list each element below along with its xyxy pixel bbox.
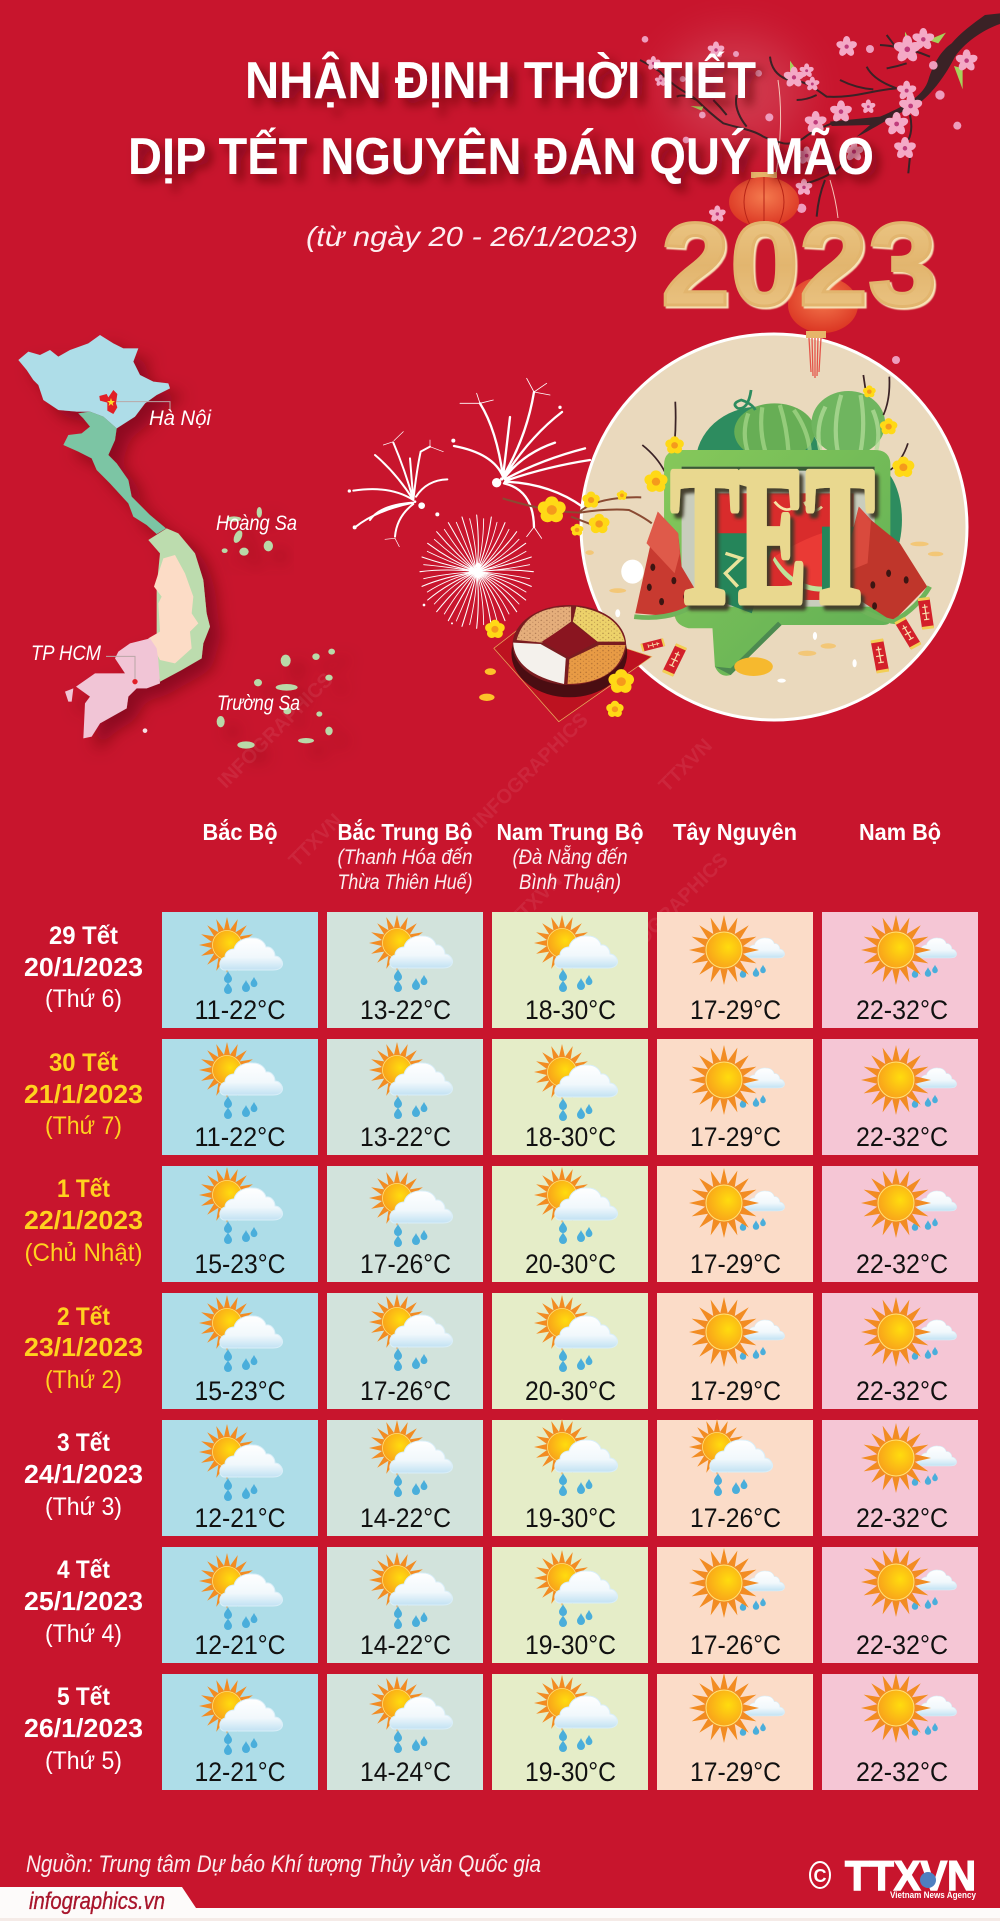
tendril (735, 390, 755, 410)
row label: 29 Tet: 29 Tết (49, 922, 119, 950)
weather row: 29 Tet: 11-22°C (194, 995, 286, 1025)
header: Nam Trung Bo: Bình Thuận) (519, 871, 621, 894)
weather row: 30 Tet: 22-32°C (856, 1122, 948, 1152)
weather row: 5 Tet: 22-32°C (856, 1757, 948, 1787)
weather row: 1 Tet: 20-30°C (525, 1249, 616, 1279)
row label: 30 Tet: (Thứ 7) (45, 1112, 122, 1140)
mam ngu qua tray (494, 605, 652, 722)
firecrackers (640, 597, 934, 677)
header: Nam Trung Bo: (Đà Nẵng đến (512, 846, 628, 869)
map labels: Hà Nội (149, 407, 212, 430)
map labels: Trường Sa (217, 692, 300, 715)
Hoang Sa islands (222, 507, 273, 556)
weather row: 3 Tet: 17-26°C (690, 1503, 781, 1533)
poster behind letters (717, 493, 854, 613)
speech bubble frame (664, 450, 890, 676)
weather row: 4 Tet: 17-26°C (690, 1630, 781, 1660)
TTXVN logo: Vietnam News Agency (890, 1890, 976, 1900)
weather row: 2 Tet: 15-23°C (194, 1376, 286, 1406)
weather row: 1 Tet: 15-23°C (194, 1249, 286, 1279)
leader lines (106, 402, 170, 680)
weather row: 5 Tet: 19-30°C (525, 1757, 616, 1787)
weather row: 4 Tet: 19-30°C (525, 1630, 616, 1660)
regions (18, 335, 210, 738)
footer tab: infographics.vn (29, 1888, 165, 1915)
fireworks (348, 378, 590, 628)
header: Tay Nguyen: Tây Nguyên (673, 819, 797, 845)
row label: 29 Tet (24, 922, 143, 1013)
lantern 2 (788, 277, 858, 333)
Tet artwork (479, 375, 943, 722)
row label: 1 Tet: 1 Tết (57, 1175, 111, 1203)
HCM marker (132, 679, 138, 684)
weather row: 1 Tet (162, 1166, 978, 1282)
yellow blossom branch (503, 385, 916, 537)
firework burst 1 (348, 432, 447, 547)
row label: 5 Tet (24, 1683, 143, 1775)
Hanoi marker (99, 390, 117, 414)
weather row: 30 Tet: 13-22°C (360, 1122, 451, 1152)
weather row: 30 Tet: 11-22°C (194, 1122, 286, 1152)
title: DỊP TẾT NGUYÊN ĐÁN QUÝ MÃO (128, 127, 874, 186)
row label: 2 Tet: (Thứ 2) (45, 1366, 122, 1394)
watermarks (214, 669, 733, 973)
watermarks: TTXVN (285, 810, 347, 872)
weather row: 3 Tet: 19-30°C (525, 1503, 616, 1533)
row label: 3 Tet (24, 1429, 143, 1521)
header: Nam Trung Bo (496, 819, 644, 894)
right watermelon slice (836, 507, 930, 622)
weather row: 30 Tet: 17-29°C (690, 1122, 781, 1152)
tray flowers (479, 620, 636, 719)
TTXVN logo: TTXVN (845, 1852, 976, 1899)
plum blossom branch (640, 13, 1000, 223)
row label: 4 Tet: 4 Tết (57, 1556, 111, 1584)
left watermelon slice (634, 512, 703, 618)
weather row: 2 Tet: 17-29°C (690, 1376, 781, 1406)
row label: 30 Tet: 30 Tết (49, 1049, 119, 1077)
map of Vietnam (18, 335, 335, 749)
weather row: 29 Tet (162, 912, 978, 1028)
firework burst 2 (451, 378, 590, 538)
melon right (811, 391, 885, 456)
row label: 3 Tet: 24/1/2023 (24, 1459, 143, 1489)
lantern 1 (729, 172, 799, 227)
weather row: 3 Tet: 22-32°C (856, 1503, 948, 1533)
weather row: 29 Tet: 13-22°C (360, 995, 451, 1025)
footer tab (0, 1887, 1000, 1921)
row label: 5 Tet: 26/1/2023 (24, 1713, 143, 1743)
TTXVN logo: C (814, 1866, 826, 1886)
map labels (31, 407, 300, 715)
lantern tassel (806, 331, 826, 378)
row label: 2 Tet: 2 Tết (57, 1303, 111, 1331)
header: Bac Trung Bo: Bắc Trung Bộ (338, 818, 472, 845)
map labels: TP HCM (31, 642, 101, 665)
row label: 4 Tet: 25/1/2023 (24, 1586, 143, 1616)
watermarks: INFOGRAPHICS (609, 849, 733, 973)
weather row: 1 Tet: 17-26°C (360, 1249, 451, 1279)
watermarks: INFOGRAPHICS (469, 709, 593, 833)
row label: 29 Tet: (Thứ 6) (45, 985, 122, 1013)
subtitle: (từ ngày 20 - 26/1/2023) (306, 221, 638, 252)
weather row: 5 Tet: 17-29°C (690, 1757, 781, 1787)
row label: 2 Tet: 23/1/2023 (24, 1332, 143, 1362)
weather row: 29 Tet: 22-32°C (856, 995, 948, 1025)
header: Bac Trung Bo: Thừa Thiên Huế) (338, 871, 472, 894)
year 2023: 2023 (661, 199, 937, 331)
header: Bac Trung Bo (338, 818, 472, 894)
map labels: Hoàng Sa (216, 512, 297, 535)
row label: 3 Tet: (Thứ 3) (45, 1493, 122, 1521)
row label: 2 Tet (24, 1303, 143, 1394)
header: Nam Trung Bo: Nam Trung Bộ (496, 819, 644, 845)
title: NHẬN ĐỊNH THỜI TIẾT (245, 51, 756, 110)
weather row: 4 Tet: 12-21°C (194, 1630, 286, 1660)
header: Nam Bo: Nam Bộ (859, 819, 941, 845)
title (128, 51, 874, 186)
row label: 1 Tet: (Chủ Nhật) (24, 1239, 142, 1267)
weather row: 3 Tet (162, 1419, 978, 1536)
weather row: 30 Tet: 18-30°C (525, 1122, 616, 1152)
lantern strings (776, 80, 838, 218)
row label: 30 Tet (24, 1049, 143, 1140)
weather row: 5 Tet: 14-24°C (360, 1757, 451, 1787)
weather row: 29 Tet: 18-30°C (525, 995, 616, 1025)
row label: 1 Tet (24, 1175, 143, 1267)
weather row: 4 Tet (162, 1547, 978, 1663)
column headers (202, 818, 941, 894)
weather row: 4 Tet: 22-32°C (856, 1630, 948, 1660)
melon left (734, 403, 815, 460)
row label: 4 Tet: (Thứ 4) (45, 1620, 122, 1648)
source note: Nguồn: Trung tâm Dự báo Khí tượng Thủy văn Quốc gia (26, 1851, 541, 1878)
twigs (642, 375, 908, 472)
pink dot (892, 356, 900, 364)
weather row: 29 Tet: 17-29°C (690, 995, 781, 1025)
watermarks: TTXVN (505, 870, 567, 932)
weather row: 1 Tet: 22-32°C (856, 1249, 948, 1279)
weather row: 2 Tet: 17-26°C (360, 1376, 451, 1406)
row label: 5 Tet: 5 Tết (57, 1683, 111, 1711)
Truong Sa islands (217, 649, 335, 749)
row label: 3 Tet: 3 Tết (57, 1429, 111, 1457)
header: Bac Bo: Bắc Bộ (202, 818, 278, 845)
weather row: 2 Tet: 20-30°C (525, 1376, 616, 1406)
gold leaf and petals (585, 542, 943, 683)
row label: 1 Tet: 22/1/2023 (24, 1205, 143, 1235)
row label: 5 Tet: (Thứ 5) (45, 1747, 122, 1775)
weather row: 30 Tet (162, 1039, 978, 1155)
Tet circle (581, 334, 967, 720)
weather row: 1 Tet: 17-29°C (690, 1249, 781, 1279)
row label: 30 Tet: 21/1/2023 (24, 1079, 143, 1109)
weather row: 2 Tet (162, 1293, 978, 1409)
firework burst 3 (420, 512, 533, 628)
weather row: 5 Tet (162, 1673, 978, 1790)
weather row: 2 Tet: 22-32°C (856, 1376, 948, 1406)
weather row: 3 Tet: 14-22°C (360, 1503, 451, 1533)
header: Bac Trung Bo: (Thanh Hóa đến (338, 846, 472, 869)
glow behind branch (665, 35, 805, 145)
watermarks: TTXVN (655, 735, 717, 797)
weather row: 4 Tet: 14-22°C (360, 1630, 451, 1660)
row label: 29 Tet: 20/1/2023 (24, 952, 143, 982)
row label: 4 Tet (24, 1556, 143, 1648)
weather row: 3 Tet: 12-21°C (194, 1503, 286, 1533)
dark melon (696, 407, 822, 520)
weather row: 5 Tet: 12-21°C (194, 1757, 286, 1787)
watermarks: INFOGRAPHICS (214, 669, 338, 793)
